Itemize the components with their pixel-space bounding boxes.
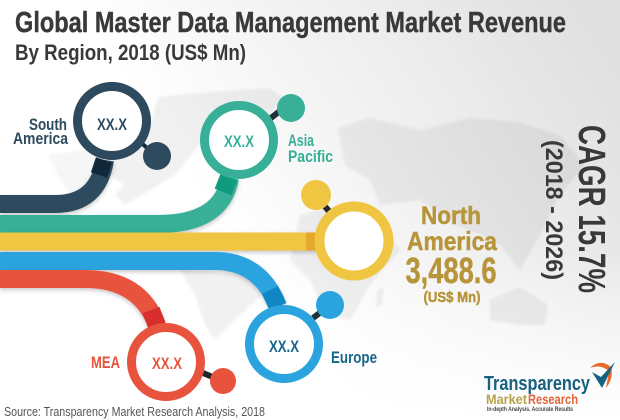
- source note: Source: Transparency Market Research Analysis, 2018: [4, 404, 265, 419]
- callout: North America value: (US$ Mn): [424, 289, 480, 306]
- callout: North America value: 3,488.6: [406, 250, 496, 291]
- node: MEA: [0, 279, 236, 396]
- node: MEA: XX.X: [152, 354, 183, 373]
- node: South America: South: [29, 115, 67, 134]
- node: Asia Pacific: Pacific: [288, 147, 333, 166]
- logo: Transparency Market Research: [484, 362, 615, 413]
- node: Europe: XX.X: [269, 337, 300, 356]
- callout: North America value: North: [421, 202, 481, 230]
- logo: Transparency Market Research: In-depth Analysis. Accurate Results: [487, 407, 574, 413]
- node: North America: [0, 180, 388, 276]
- node: MEA: MEA: [91, 353, 120, 372]
- node: South America: [0, 86, 171, 204]
- logo: Transparency Market Research: Transparency: [484, 373, 591, 395]
- CAGR callout: CAGR 15.7%: [570, 125, 612, 293]
- node: Europe: [0, 261, 377, 378]
- logo: Transparency Market Research: Market: [486, 391, 527, 407]
- node: Asia Pacific: Asia: [288, 131, 314, 150]
- node: South America: America: [13, 129, 68, 148]
- subtitle: By Region, 2018 (US$ Mn): [15, 40, 246, 65]
- node: Asia Pacific: [0, 94, 333, 224]
- world map: [48, 88, 585, 340]
- logo: Transparency Market Research: Research: [528, 391, 578, 407]
- callout: North America value: [406, 202, 497, 306]
- node: Europe: Europe: [331, 348, 377, 367]
- CAGR callout: (2018 - 2026): [540, 140, 567, 280]
- node: Asia Pacific: XX.X: [224, 132, 255, 151]
- node: South America: XX.X: [97, 115, 128, 134]
- callout: North America value: America: [407, 226, 497, 256]
- CAGR callout: [540, 125, 612, 293]
